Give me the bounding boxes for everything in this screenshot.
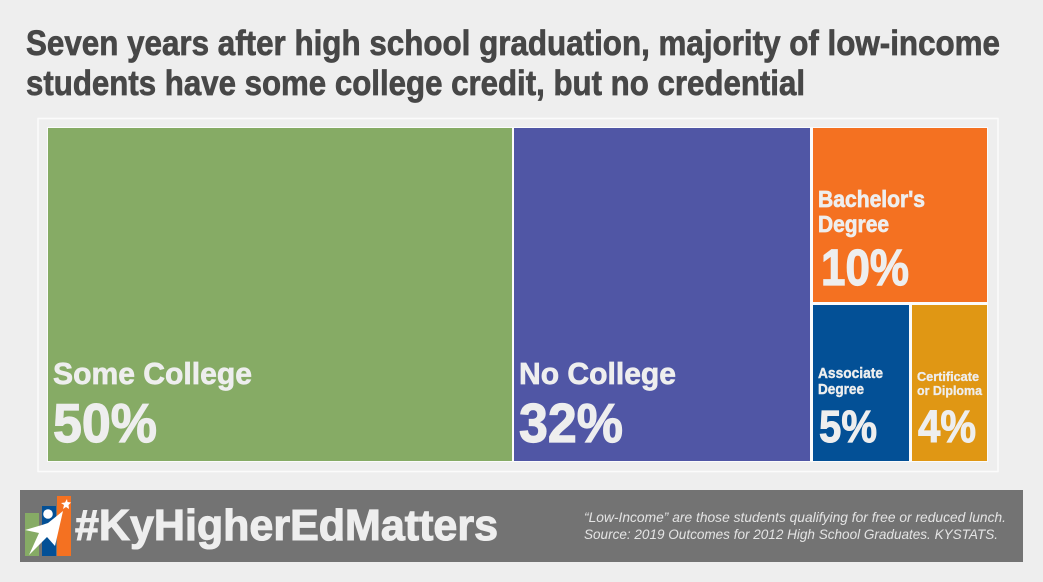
footer banner	[20, 490, 1023, 562]
panel: Bachelor's Degree 10%: Bachelor's	[818, 186, 925, 212]
treemap chart	[38, 118, 998, 472]
source note	[584, 509, 1006, 542]
panel: Associate Degree 5%: 5%	[819, 401, 877, 452]
panel: Associate Degree 5%: Associate	[818, 365, 883, 382]
panel: Bachelor's Degree 10%: Degree	[818, 211, 889, 237]
title: students have some college credit, but no credential	[26, 64, 805, 103]
hashtag: #KyHigherEdMatters	[75, 501, 498, 550]
panel: Some College 50%	[48, 128, 512, 461]
panel: Associate Degree 5%: Degree	[818, 381, 864, 398]
panel: Certificate or Diploma 4%	[912, 305, 987, 461]
panel: Some College 50%: 50%	[53, 392, 157, 454]
source note: “Low-Income” are those students qualifying for free or reduced lunch.	[584, 509, 1006, 525]
panel: Bachelor's Degree 10%: 10%	[821, 239, 909, 296]
panel: No College 32%: No College	[519, 356, 676, 391]
icon: logo	[25, 496, 71, 556]
panel: No College 32%: 32%	[519, 392, 623, 454]
panel: No College 32%	[514, 128, 810, 461]
panel: Bachelor's Degree 10%	[813, 128, 987, 302]
panel: Certificate or Diploma 4%: or Diploma	[917, 384, 983, 398]
panel: Associate Degree 5%	[813, 305, 909, 461]
title	[26, 24, 1000, 103]
panel: Some College 50%: Some College	[53, 356, 252, 391]
panel: Certificate or Diploma 4%: Certificate	[917, 370, 979, 384]
source note: Source: 2019 Outcomes for 2012 High School Graduates. KYSTATS.	[584, 526, 998, 542]
panel: Certificate or Diploma 4%: 4%	[918, 401, 976, 452]
